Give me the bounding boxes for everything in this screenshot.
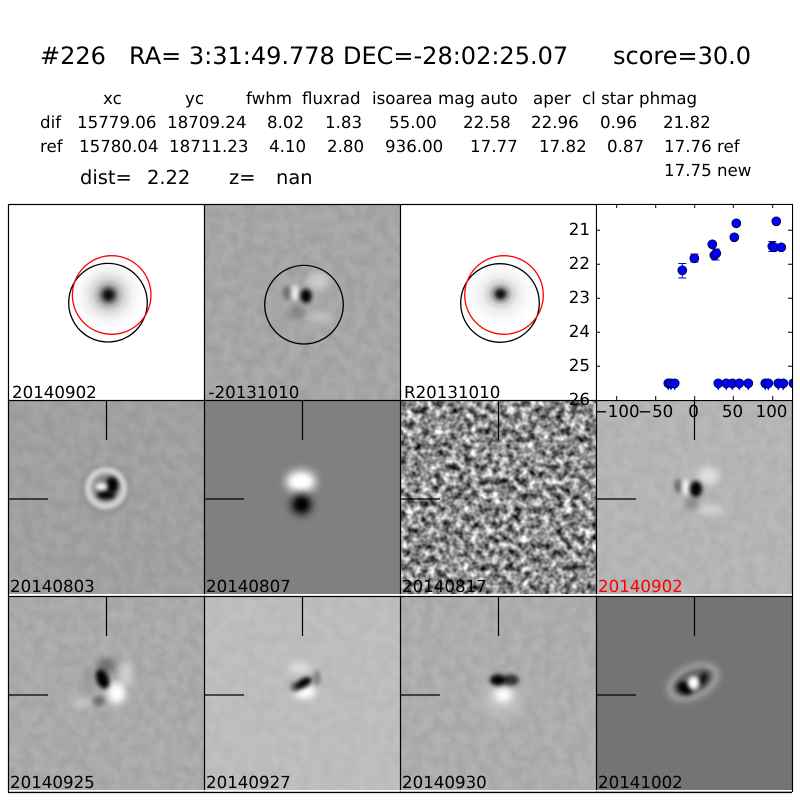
- table row: ref: 4.10: [269, 137, 306, 156]
- black aperture circle: [461, 264, 539, 342]
- icon: bright source: [464, 261, 536, 327]
- grid lines and crosshairs: [8, 204, 792, 792]
- black aperture circle: [69, 263, 147, 342]
- table row: dif: 21.82: [663, 113, 711, 132]
- distance and redshift: 2.22: [147, 166, 190, 189]
- table row: ref: 2.80: [327, 137, 364, 156]
- table row: ref: 17.77: [470, 137, 518, 156]
- panel label: 20140807: 20140807: [206, 577, 291, 596]
- x axis labels: 0: [688, 402, 699, 421]
- table row: dif: 55.00: [389, 113, 437, 132]
- panel: difference image -20131010: [204, 204, 400, 400]
- table row: ref: ref: [40, 137, 64, 156]
- table header row: mag auto: [438, 89, 518, 108]
- table header row: xc: [103, 89, 122, 108]
- table row: ref: 17.82: [539, 137, 587, 156]
- table row: dif: 22.96: [531, 113, 579, 132]
- title: score=30.0: [613, 42, 751, 70]
- table header row: aper: [533, 89, 571, 108]
- y axis labels: [569, 220, 590, 409]
- panel label: 20140902: 20140902: [12, 383, 97, 402]
- red aperture circle: [465, 256, 543, 334]
- panel: row 3 image 20140927: [204, 597, 400, 792]
- panel: reference image R20131010 with circles: [400, 204, 596, 400]
- panel label: 20140925: 20140925: [10, 773, 95, 792]
- table row: ref: [40, 137, 741, 156]
- y axis labels: 24: [569, 322, 590, 341]
- table row: dif: 1.83: [325, 113, 362, 132]
- y axis labels: 23: [569, 288, 590, 307]
- x axis labels: −50: [638, 402, 673, 421]
- x axis labels: 100: [756, 402, 787, 421]
- table row: ref: 15780.04: [79, 137, 158, 156]
- table row: dif: 8.02: [267, 113, 304, 132]
- data points: detections: [678, 217, 786, 275]
- table row: dif: dif: [40, 113, 62, 132]
- table row: dif: 18709.24: [167, 113, 246, 132]
- y axis labels: 22: [569, 254, 590, 273]
- table header row: phmag: [639, 89, 697, 108]
- x axis labels: −100: [594, 402, 640, 421]
- panel: reference image 20140902 with circles: [8, 204, 204, 400]
- table row: dif: 22.58: [463, 113, 511, 132]
- panel: row 2 image 20140807: [204, 400, 400, 595]
- panel label: R20131010: R20131010: [404, 383, 500, 402]
- distance and redshift: [80, 166, 313, 189]
- table header row: yc: [185, 89, 204, 108]
- table row: ref: 17.76 ref: [664, 137, 741, 156]
- panel label: 20140803: 20140803: [10, 577, 95, 596]
- title: RA= 3:31:49.778: [129, 42, 335, 70]
- panel label: 20140902 in red: 20140902: [598, 577, 683, 596]
- table header row: fluxrad: [302, 89, 361, 108]
- x axis labels: 50: [722, 402, 743, 421]
- table row: dif: 0.96: [600, 113, 637, 132]
- table row: ref: 18711.23: [169, 137, 248, 156]
- axis ticks: [596, 204, 792, 400]
- title: #226: [40, 42, 106, 70]
- table header row: [103, 89, 697, 108]
- table row: ref: 936.00: [385, 137, 443, 156]
- chart: light curve: [569, 204, 798, 421]
- panel: row 2 noisy image 20140817: [400, 400, 596, 595]
- distance and redshift: dist=: [80, 166, 132, 189]
- table row: dif: 15779.06: [77, 113, 156, 132]
- table header row: fwhm: [246, 89, 292, 108]
- panel: row 2 image 20140902: [596, 400, 792, 595]
- panel label: 20140927: 20140927: [206, 773, 291, 792]
- white gaps between rows: [9, 594, 792, 792]
- black aperture circle: [265, 265, 343, 344]
- panel: row 3 image 20140925: [8, 597, 204, 792]
- y axis labels: 26: [569, 390, 590, 409]
- table header row: isoarea: [372, 89, 433, 108]
- data points: upper limits: [664, 379, 798, 390]
- title: DEC=-28:02:25.07: [343, 42, 568, 70]
- table row: ref: 0.87: [607, 137, 644, 156]
- panel: row 3 image 20141002: [596, 597, 792, 792]
- panel label: 20140930: 20140930: [402, 773, 487, 792]
- red aperture circle: [72, 256, 151, 334]
- y axis labels: 21: [569, 220, 590, 239]
- error bars: [678, 242, 776, 278]
- new magnitude: 17.75 new: [664, 161, 751, 180]
- panel label: 20140817: 20140817: [402, 577, 487, 596]
- panel: row 2 image 20140803: [8, 400, 204, 595]
- table row: dif: [40, 113, 711, 132]
- icon: bright source: [72, 259, 144, 331]
- table header row: cl star: [582, 89, 633, 108]
- title: [40, 42, 751, 70]
- panel label: -20131010: -20131010: [208, 383, 299, 402]
- distance and redshift: z=: [229, 166, 256, 189]
- x axis labels: [594, 402, 787, 421]
- panel: row 3 image 20140930: [400, 597, 596, 792]
- panel label: 20141002: 20141002: [598, 773, 683, 792]
- y axis labels: 25: [569, 356, 590, 375]
- distance and redshift: nan: [276, 166, 313, 189]
